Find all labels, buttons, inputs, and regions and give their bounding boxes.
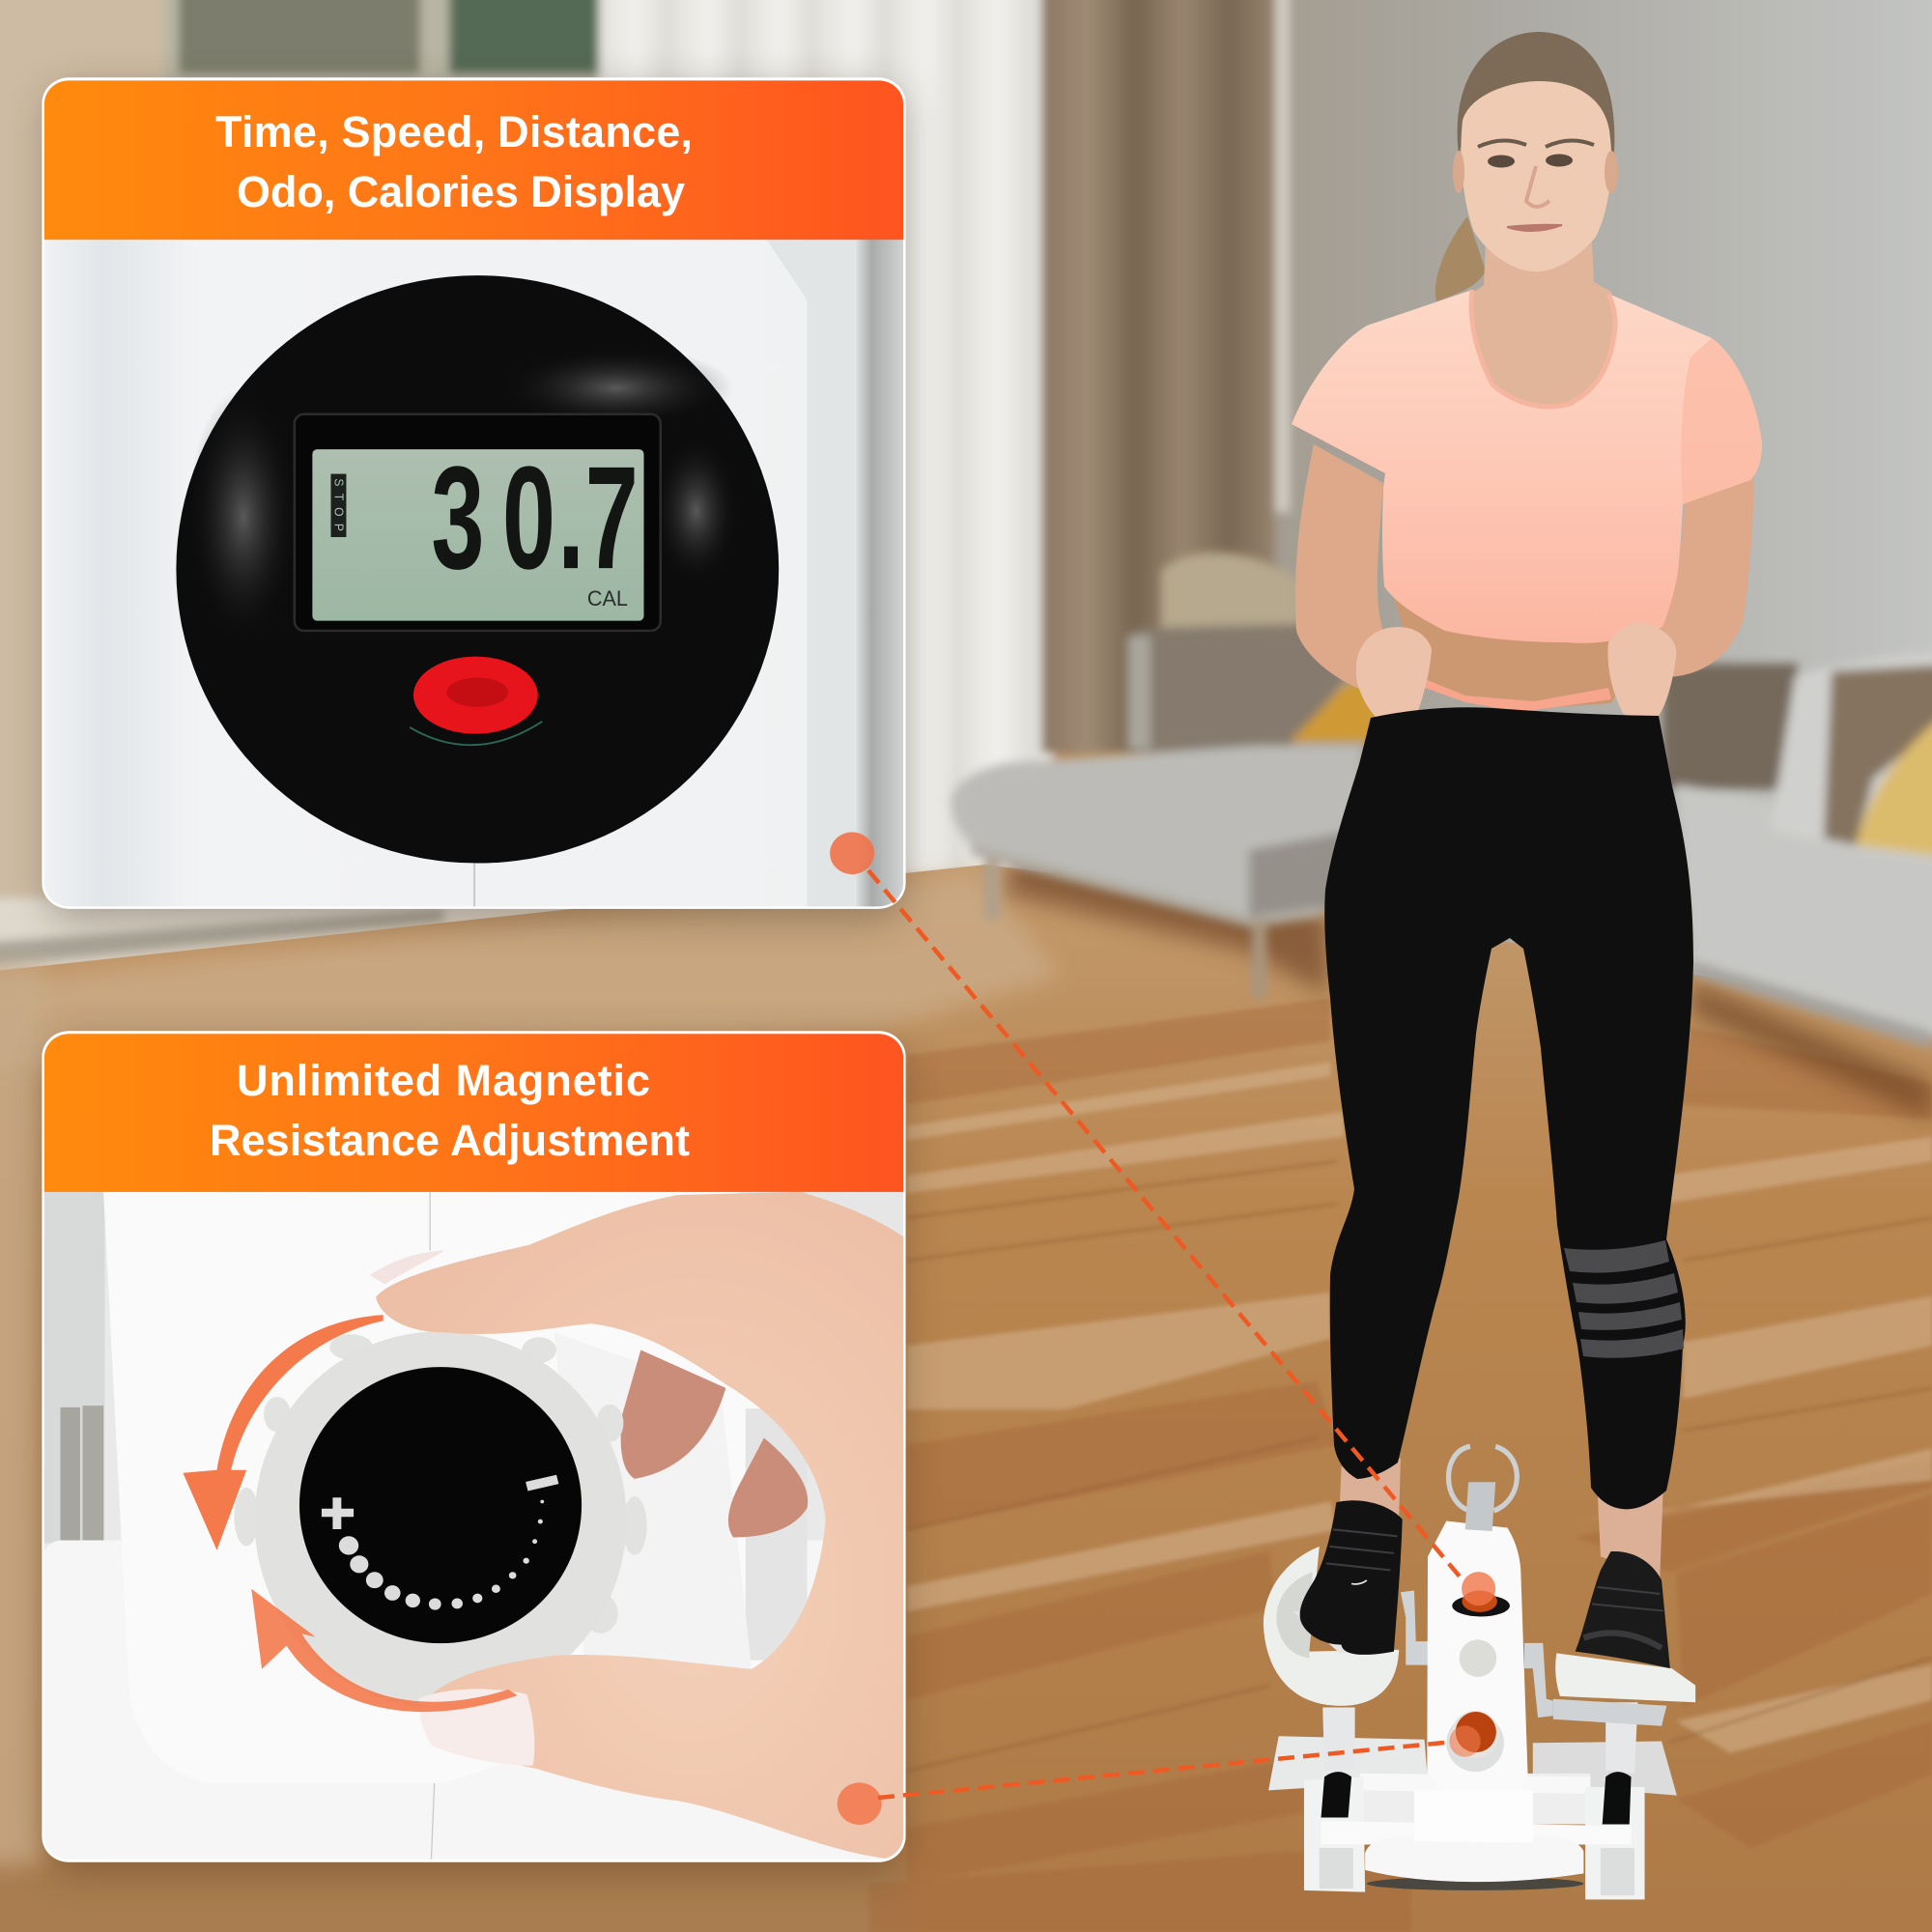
column behind fingers [746,1618,751,1660]
arms [1295,444,1754,691]
rear fingers [621,1350,808,1537]
ponytail [1435,216,1486,301]
orange header [43,77,906,240]
neck and chest [1468,242,1617,411]
bracket [61,1406,103,1541]
red button [410,657,542,745]
right shoe [1576,1551,1670,1668]
plus and minus marks [322,1497,354,1529]
LCD reading: 30.7 [431,437,639,600]
wall and window backdrop [0,0,1932,1034]
display bezel [295,414,661,631]
right pedal [1555,1653,1695,1702]
hands [1356,622,1676,718]
calories unit: CAL [587,586,628,611]
panel body with knob photo [42,1031,906,1862]
thumb nail [418,1689,534,1766]
top orange hub [1452,1572,1510,1616]
left pedal [1264,1547,1399,1706]
panel: time, speed, distance, odo, calories display [42,77,906,909]
leggings [1324,707,1693,1509]
lower knob highlighted [1446,1711,1504,1772]
heading: Resistance Adjustment [210,1116,690,1165]
cup ring [1449,1446,1517,1531]
seam [473,864,475,906]
head [1453,32,1618,271]
photo: woman standing on the stepper [1292,32,1762,1577]
grip nubs [234,1334,647,1634]
level dots [339,1500,544,1610]
floor planks [869,998,1932,1932]
STOP indicator: STOP [331,478,346,531]
orange header [43,1031,906,1192]
anchor dot [838,1782,882,1825]
center block [1414,1790,1533,1843]
ankles [1340,1459,1663,1577]
hand [376,1192,906,1862]
rotation arrow: down [251,1589,518,1712]
heading: Odo, Calories Display [237,167,685,216]
left pedal tread [1276,1572,1313,1659]
left shoe [1293,1500,1403,1655]
photo: mini stepper machine [1264,1446,1695,1899]
LCD screen [312,449,644,621]
heading: Unlimited Magnetic [237,1056,650,1105]
panel shadows [48,89,903,1872]
central column [1427,1521,1528,1790]
monitor disc [176,275,779,864]
linkage arms [1401,1590,1666,1726]
knee stripes [1564,1240,1684,1358]
wood floor [0,865,1932,1932]
neckline trim [1471,290,1615,407]
rotation arrow: up [183,1315,384,1550]
heading [215,107,693,216]
sofa [952,553,1932,1049]
panel body with monitor photo [42,77,906,909]
grey port [1460,1639,1496,1677]
struts [1322,1702,1638,1774]
shirt [1292,290,1762,643]
dashed leader line: resistance knob [878,1743,1444,1798]
white housing [103,1192,759,1540]
midriff [1391,589,1666,710]
panel: unlimited magnetic resistance adjustment [42,1031,906,1862]
index nail [370,1251,444,1285]
wheels [1321,1772,1631,1824]
anchor dot [830,832,874,874]
base plate [1365,1836,1583,1882]
dial [254,1331,627,1708]
dashed leader line: display [868,870,1460,1577]
shirt hem band [1425,679,1611,712]
heading: Time, Speed, Distance, [215,107,693,156]
wings and rear frame [1268,1736,1677,1899]
cushion: fluffy [1161,553,1299,647]
sofa shadow on floor [1005,850,1932,1121]
shirt sleeve shade [1681,338,1762,504]
heading [210,1056,690,1165]
machine shadow [1367,1877,1583,1890]
